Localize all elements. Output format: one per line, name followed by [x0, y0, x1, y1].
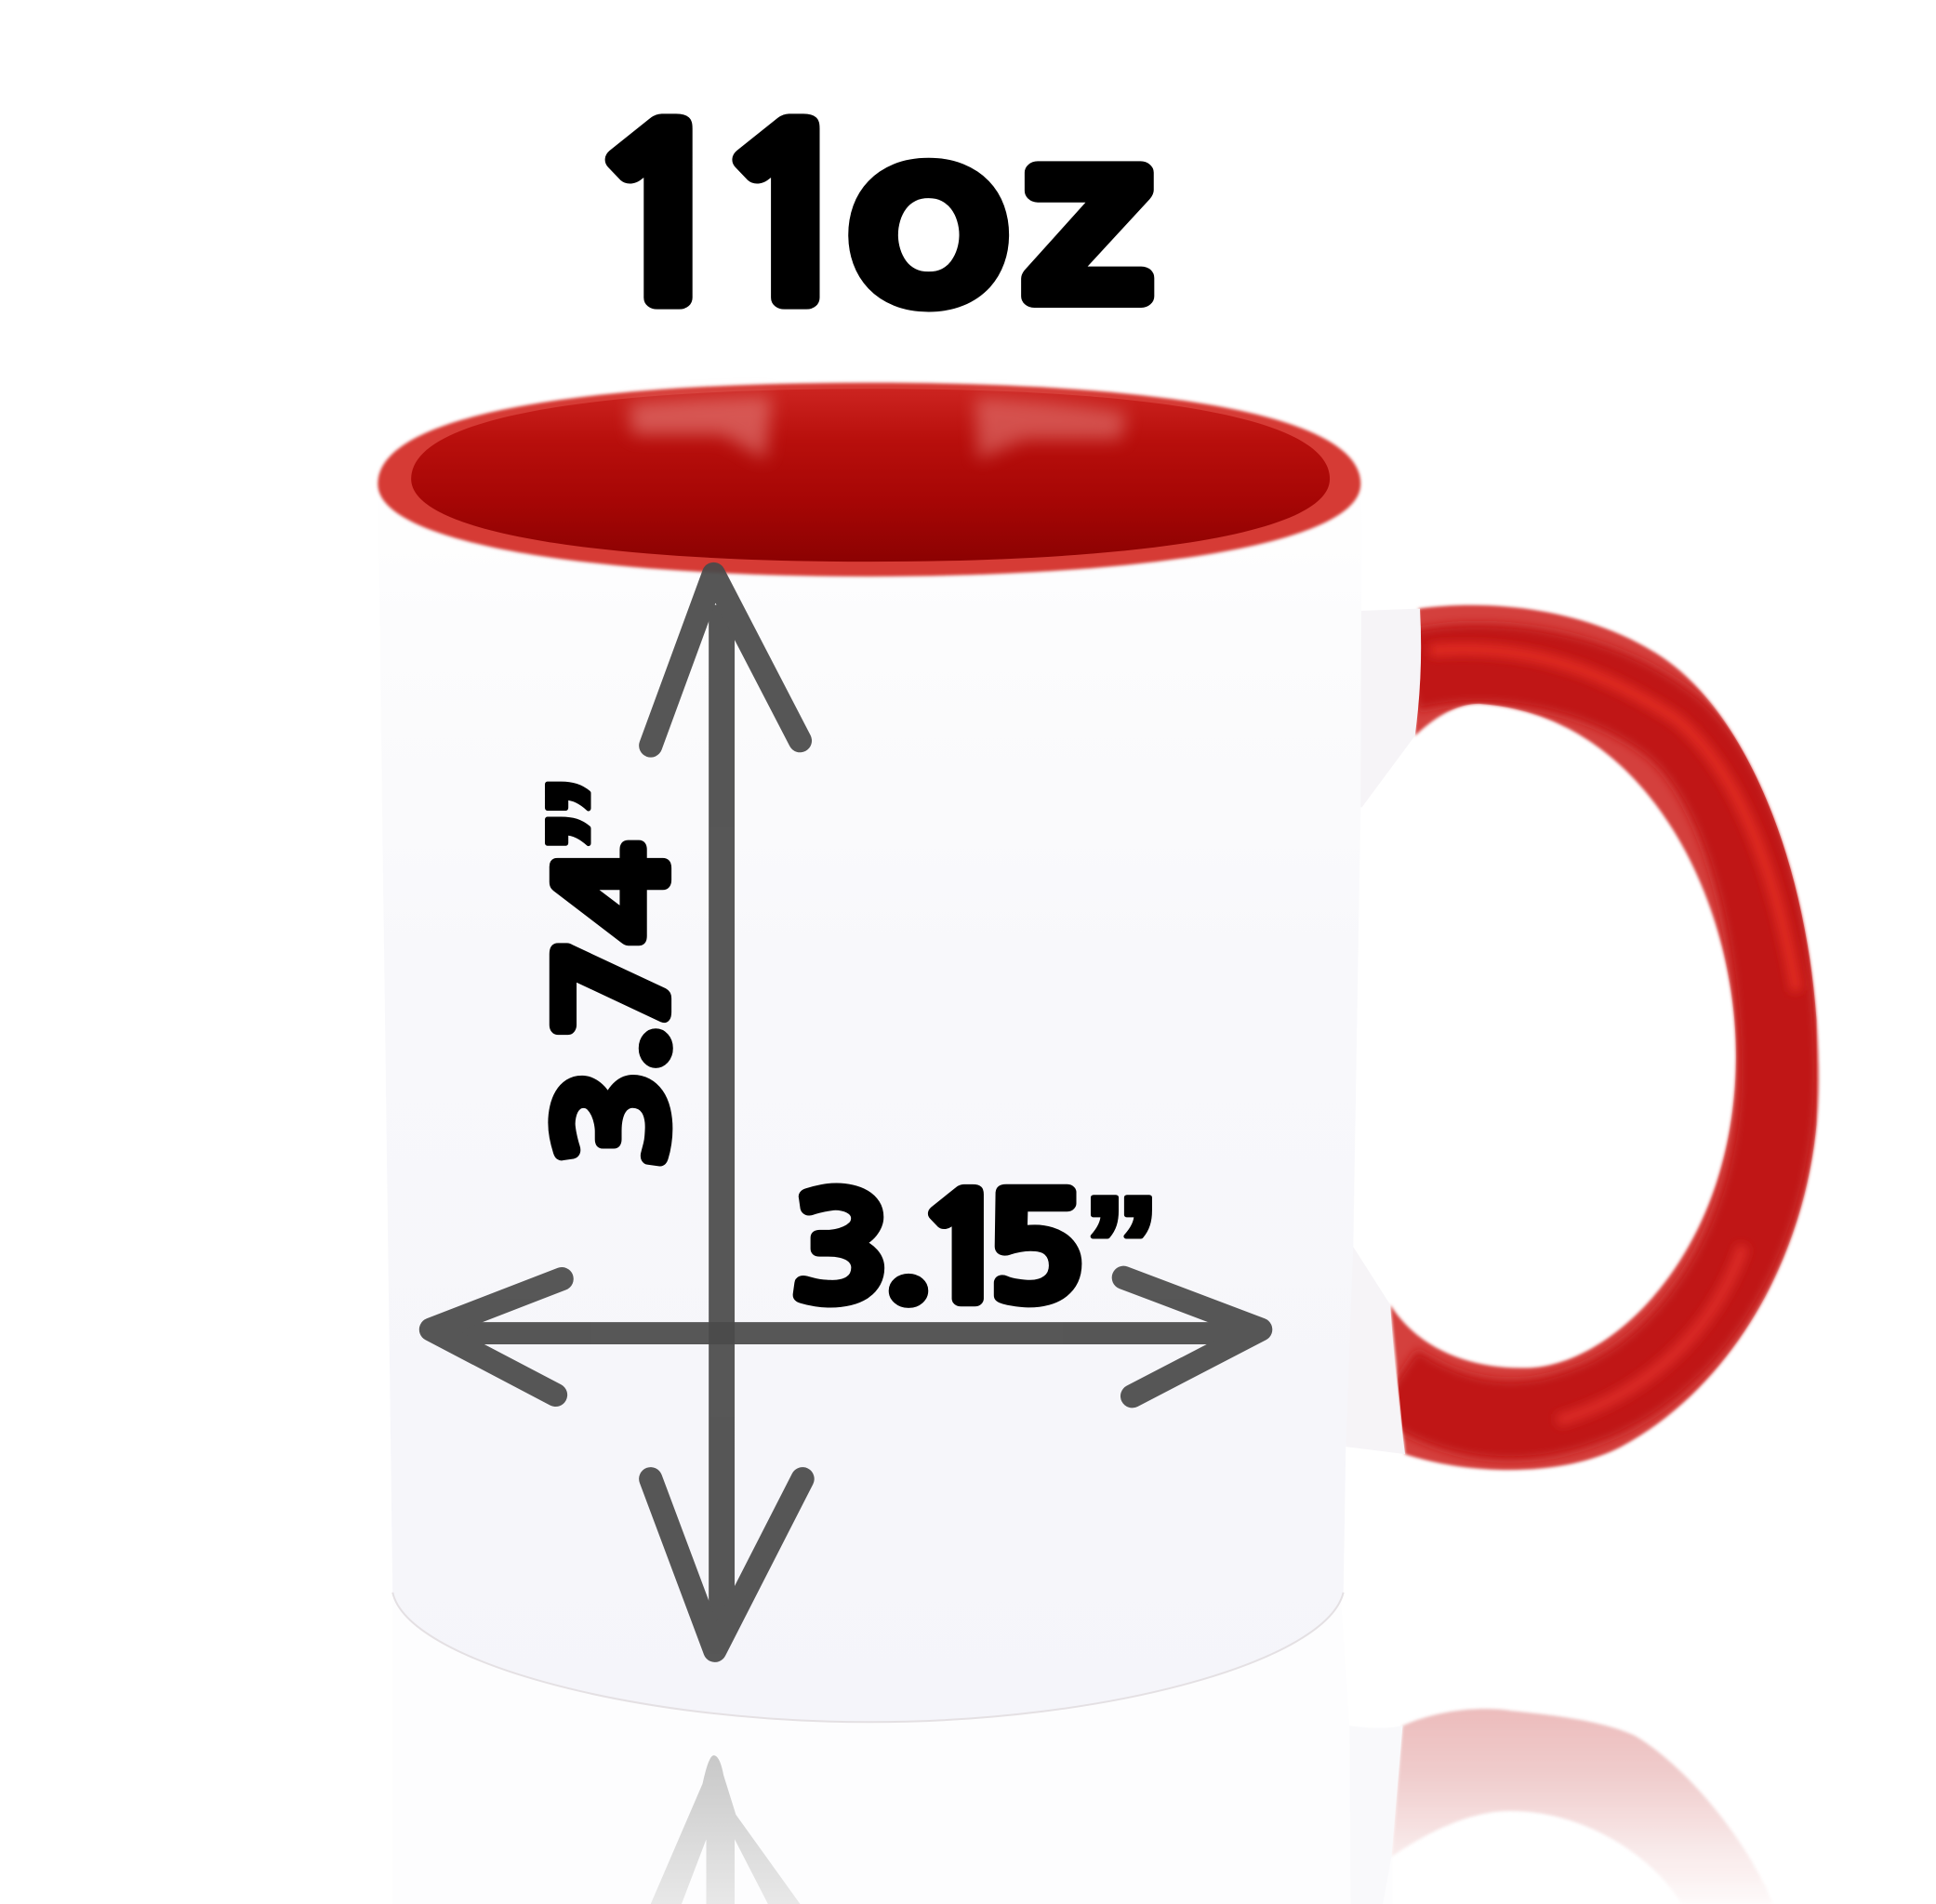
- mug rim: [378, 383, 1360, 576]
- mug reflection: [392, 1599, 1773, 1904]
- handle core shading: [1395, 664, 1778, 1421]
- mug body: [378, 479, 1362, 1722]
- label: width 3.15 inches: 3.15: [790, 1170, 1085, 1321]
- label: width 3.15 inches: ”: [1081, 1168, 1161, 1322]
- title: 11oz: [580, 102, 1151, 336]
- label: height 3.74 inches: 3.74: [536, 842, 686, 1169]
- label: height 3.74 inches: ”: [515, 772, 679, 855]
- handle highlight lower: [1557, 1246, 1744, 1421]
- lower handle joint: [1346, 1247, 1405, 1454]
- upper handle joint: [1356, 609, 1421, 807]
- mug handle: [1390, 605, 1819, 1470]
- interior reflection right: [975, 398, 1126, 459]
- arrow: horizontal width: [431, 1277, 1261, 1396]
- arrow: vertical height: [651, 574, 802, 1650]
- interior reflection left: [630, 396, 772, 459]
- base edge: [392, 1593, 1344, 1722]
- handle highlight upper: [1430, 649, 1797, 991]
